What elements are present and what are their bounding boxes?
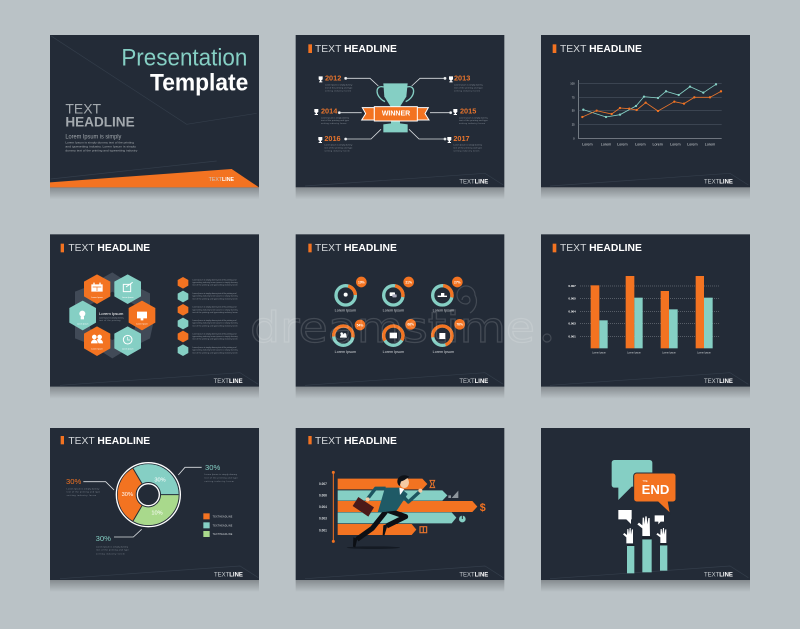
footer label: TEXTLINE — [209, 177, 234, 183]
list of hexagon items: typesetting industry lorem ipsum is simply dummy — [192, 322, 239, 325]
donut 3: Lorem Ipsum — [433, 309, 454, 313]
callout: left: 30% — [66, 477, 82, 486]
donut 4 — [333, 320, 365, 354]
footer label: TEXTLINE — [459, 379, 488, 385]
arrow bars — [338, 479, 477, 535]
orange speech bubble — [634, 473, 676, 514]
icons at arrow tips: $ — [480, 502, 486, 514]
footer label: TEXTLINE — [214, 379, 243, 385]
line chart: Lorem — [601, 143, 611, 147]
year 2012: setting industry lorem — [325, 89, 351, 92]
donut 2 — [382, 277, 414, 313]
year 2014: setting industry lorem — [321, 122, 347, 125]
panel: donut percentages — [296, 234, 504, 399]
year 2016: text of the printing and type — [324, 146, 353, 149]
cover title: Template — [150, 70, 248, 97]
footer label: TEXTLINE — [459, 180, 488, 186]
axis with values: 0.006 — [319, 494, 327, 498]
year 2013: text of the printing and type — [454, 86, 483, 89]
footer label: TEXTLINE — [459, 572, 488, 578]
callout: bottom: text of the printing and type — [96, 549, 129, 552]
line chart: 0 — [573, 136, 575, 140]
donut 1: 19% — [358, 280, 365, 284]
bar chart: 0.003 — [568, 322, 576, 326]
callout: bottom: 30% — [96, 534, 111, 543]
year 2015: 2015 — [460, 107, 476, 116]
line chart: 75 — [572, 95, 575, 99]
year 2014: 2014 — [321, 107, 338, 116]
winner ribbon: WINNER — [382, 111, 410, 118]
ground shadow — [347, 546, 400, 549]
axis with values: 0.004 — [319, 505, 327, 509]
headline: TEXT HEADLINE — [315, 44, 397, 55]
list of hexagon items: Lorem Ipsum is simply dummy text of the printing and — [192, 319, 237, 322]
line chart: Lorem — [652, 143, 663, 147]
year 2012 — [319, 74, 353, 92]
panel: winner trophy timeline — [296, 35, 504, 199]
cover body text: dummy text of the printing and typesetting industry — [65, 148, 138, 152]
headline: TEXT HEADLINE — [560, 243, 642, 254]
axis with values: 0.003 — [319, 517, 327, 521]
bar chart: 0.001 — [568, 334, 576, 338]
panel: cover slide — [50, 35, 259, 199]
headline: TEXT HEADLINE — [560, 44, 642, 55]
footer label: TEXTLINE — [704, 572, 733, 578]
cover headline: HEADLINE — [65, 114, 135, 129]
line chart: 50 — [572, 109, 575, 113]
year 2014: text of the printing and type — [321, 119, 350, 122]
year 2014: Lorem Ipsum is simply dummy — [321, 116, 350, 119]
callout: left: Lorem Ipsum is simply dummy — [67, 487, 100, 490]
hexagon: bulb: Lorem Ipsum — [77, 322, 89, 325]
list of hexagon items: text of the printing and typesetting industry lorem — [192, 311, 238, 314]
axis with values: 0.001 — [319, 529, 327, 533]
headline: TEXT HEADLINE — [315, 436, 397, 447]
panel: the end — [541, 428, 750, 592]
donut 6 — [431, 319, 465, 354]
orange speech bubble: END — [642, 482, 670, 497]
year 2016: 2016 — [324, 134, 341, 143]
callout: top right: 30% — [205, 463, 221, 472]
headline: TEXT HEADLINE — [315, 243, 397, 254]
donut 2: Lorem Ipsum — [383, 309, 404, 313]
donut 4: Lorem Ipsum — [335, 350, 356, 354]
list of hexagon items: typesetting industry lorem ipsum is simply dummy — [192, 335, 239, 338]
hexagon: calendar — [84, 274, 110, 304]
footer label: TEXTLINE — [704, 379, 733, 385]
panel: bar chart — [541, 234, 750, 399]
ring pie chart: 10% — [151, 510, 163, 516]
panel: running businessman — [296, 428, 504, 592]
callout: top right: text of the printing and type — [204, 476, 238, 479]
ring pie chart: 30% — [122, 492, 133, 498]
list of hexagon items: typesetting industry lorem ipsum is simply dummy — [192, 308, 239, 311]
year 2017: text of the printing and type — [453, 146, 483, 149]
small white speech bubbles — [618, 510, 664, 524]
donut 5: 66% — [407, 323, 414, 327]
callout: bottom: setting industry lorem — [96, 552, 125, 555]
hexagon: calendar: Lorem Ipsum — [91, 296, 103, 299]
hexagon: people — [84, 326, 110, 356]
year 2017: setting industry lorem — [453, 149, 480, 152]
donut 3 — [432, 277, 463, 313]
cover body text: Lorem Ipsum is simply — [65, 133, 122, 140]
year 2015: setting industry lorem — [459, 122, 485, 125]
axis with values — [319, 471, 335, 543]
year 2017: Lorem Ipsum is simply dummy — [453, 143, 483, 146]
line chart: Lorem — [582, 143, 593, 147]
cover title: Presentation — [121, 45, 247, 72]
bar chart: Lorem Ipsum — [697, 351, 711, 354]
hexagon: target — [114, 274, 141, 304]
donut 2: 21% — [405, 280, 412, 284]
centre text: text of the printing — [99, 319, 121, 322]
year 2015 — [453, 107, 489, 125]
list of hexagon items: typesetting industry lorem ipsum is simply dummy — [192, 349, 239, 352]
callout: top right — [178, 463, 238, 483]
panel: line chart — [541, 35, 750, 199]
callout: bottom — [96, 529, 142, 555]
raised arm: right — [656, 528, 667, 571]
headline: TEXT HEADLINE — [68, 243, 150, 254]
hexagon: people: Lorem Ipsum — [91, 348, 103, 351]
list of hexagon items: Lorem Ipsum is simply dummy text of the printing and — [192, 346, 237, 349]
teal speech bubble — [612, 460, 652, 500]
line chart — [570, 80, 722, 147]
callout: left — [66, 477, 114, 497]
donut 6: 76% — [456, 323, 463, 327]
centre text: Lorem Ipsum is simply dummy — [99, 316, 125, 319]
callout: left: setting industry lorem — [67, 494, 96, 497]
legend: TEXTHEADLINE — [213, 533, 233, 536]
donut 5 — [380, 319, 416, 354]
year 2014 — [314, 107, 350, 125]
year 2013: setting industry lorem — [454, 89, 480, 92]
year 2017: 2017 — [453, 134, 470, 143]
bar chart — [568, 276, 720, 354]
footer label: TEXTLINE — [704, 180, 733, 186]
cover body text: Lorem Ipsum is simply dummy text of the printing — [65, 140, 134, 144]
hexagon: monitor: Lorem Ipsum — [136, 322, 148, 325]
line chart: Lorem — [635, 143, 646, 147]
headline: TEXT HEADLINE — [68, 436, 150, 447]
hexagon: clock — [114, 326, 141, 356]
bar chart: Lorem Ipsum — [662, 351, 676, 354]
ring pie chart: 30% — [154, 477, 166, 483]
list of hexagon items: typesetting industry lorem ipsum is simply dummy — [192, 295, 239, 298]
watermark — [250, 286, 551, 352]
callout: bottom: Lorem Ipsum is simply dummy — [96, 545, 129, 548]
year 2013: Lorem Ipsum is simply dummy — [454, 83, 484, 86]
legend — [203, 513, 233, 537]
year 2012: text of the printing and type — [325, 86, 353, 89]
orange speech bubble: THE — [642, 479, 648, 483]
year 2012: 2012 — [325, 74, 341, 83]
cover body text — [65, 133, 138, 152]
centre of ring — [90, 292, 135, 340]
donut 3: 27% — [454, 280, 461, 284]
watermark: dreamstime — [250, 303, 535, 352]
panel: pie chart — [50, 428, 259, 592]
cover body text: and typesetting industry. Lorem Ipsum is simply — [65, 144, 137, 148]
cover headline — [65, 100, 135, 129]
callout: top right: setting industry lorem — [204, 480, 234, 483]
connectors — [338, 77, 452, 140]
list of hexagon items: Lorem Ipsum is simply dummy text of the printing and — [192, 332, 237, 335]
donut 6: Lorem Ipsum — [433, 350, 454, 354]
line chart: Lorem — [617, 143, 628, 147]
axis with values: 0.007 — [319, 482, 327, 486]
list of hexagon items: Lorem Ipsum is simply dummy text of the printing and — [192, 278, 237, 281]
list of hexagon items: Lorem Ipsum is simply dummy text of the printing and — [192, 306, 237, 309]
list of hexagon items: Lorem Ipsum is simply dummy text of the printing and — [192, 292, 237, 295]
list of hexagon items: typesetting industry lorem ipsum is simply dummy — [192, 281, 239, 284]
legend: TEXTHEADLINE — [213, 524, 233, 527]
bar chart: Lorem Ipsum — [627, 351, 641, 354]
businessman — [353, 475, 422, 547]
hexagon: monitor — [129, 301, 155, 330]
year 2017 — [447, 134, 483, 152]
legend: TEXTHEADLINE — [213, 515, 233, 518]
donut 1 — [334, 277, 367, 313]
year 2013 — [449, 74, 484, 92]
list of hexagon items — [178, 277, 239, 356]
list of hexagon items: text of the printing and typesetting industry lorem — [192, 324, 238, 327]
bar chart: 0.005 — [568, 297, 576, 301]
cover title — [121, 45, 248, 97]
panel: hexagon cycle — [50, 234, 259, 399]
icons at arrow tips — [420, 480, 486, 533]
list of hexagon items: text of the printing and typesetting industry lorem — [192, 284, 238, 287]
line chart: Lorem — [670, 143, 681, 147]
centre text — [99, 312, 125, 322]
trophy — [377, 83, 414, 132]
line chart: 25 — [572, 122, 575, 126]
raised arm: left — [623, 528, 634, 573]
year 2016: setting industry lorem — [324, 149, 350, 152]
bar chart: Lorem Ipsum — [592, 351, 606, 354]
hexagon: bulb — [69, 301, 96, 330]
donut 4: 54% — [357, 323, 363, 327]
footer label: TEXTLINE — [214, 572, 243, 578]
raised arm: centre — [637, 516, 652, 572]
winner ribbon — [362, 107, 429, 121]
year 2015: text of the printing and type — [459, 119, 488, 122]
bar chart: 0.007 — [568, 284, 576, 288]
year 2016: Lorem Ipsum is simply dummy — [324, 143, 353, 146]
line chart: Lorem — [687, 143, 698, 147]
year 2012: Lorem Ipsum is simply dummy — [325, 83, 353, 86]
centre text: Lorem Ipsum — [99, 312, 123, 316]
donut 5: Lorem Ipsum — [383, 350, 404, 354]
callout: top right: Lorem Ipsum is simply dummy — [204, 473, 238, 476]
callout: left: text of the printing and type — [67, 491, 101, 494]
year 2015: Lorem Ipsum is simply dummy — [459, 116, 489, 119]
list of hexagon items: text of the printing and typesetting industry lorem — [192, 351, 238, 354]
ring pie chart — [116, 463, 180, 527]
list of hexagon items: text of the printing and typesetting industry lorem — [192, 338, 238, 341]
hexagon: clock: Lorem Ipsum — [122, 348, 134, 351]
cover headline: TEXT — [65, 100, 102, 116]
bar chart: 0.004 — [568, 309, 576, 313]
list of hexagon items: text of the printing and typesetting industry lorem — [192, 297, 238, 300]
line chart: 100 — [570, 81, 575, 85]
hexagon: target: Lorem Ipsum — [122, 296, 134, 299]
line chart: Lorem — [705, 143, 715, 147]
grey hexagon ring — [75, 272, 155, 358]
year 2013: 2013 — [454, 74, 470, 83]
year 2016 — [318, 134, 353, 152]
donut 1: Lorem Ipsum — [335, 309, 356, 313]
orange footer band — [50, 169, 259, 187]
